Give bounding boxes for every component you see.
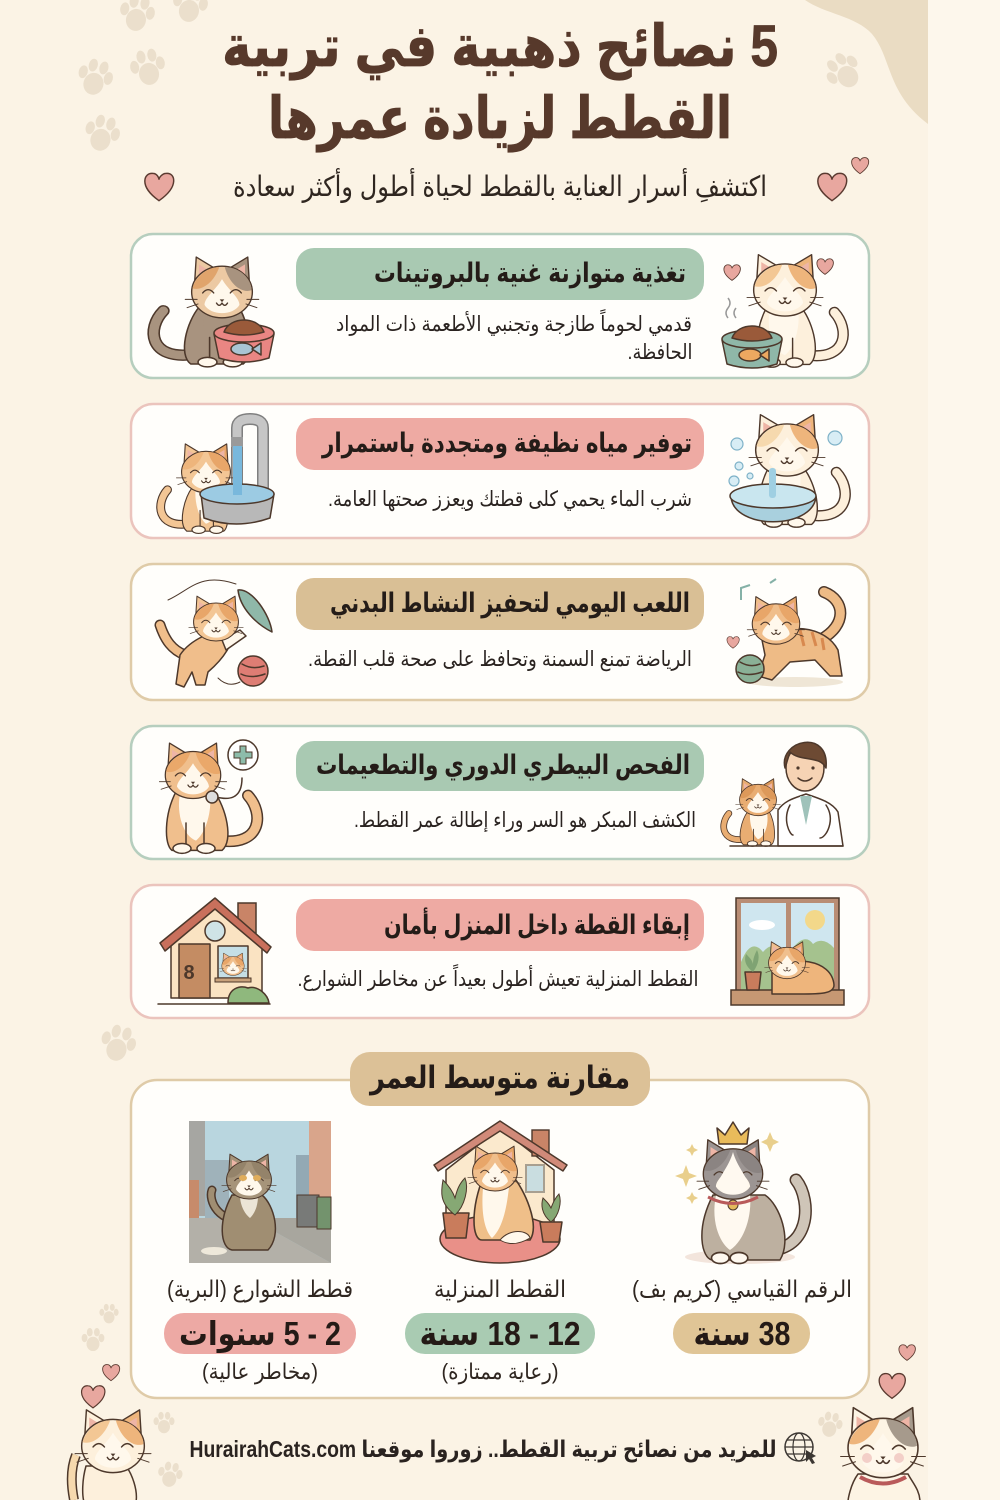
panel: indoors <box>131 885 869 1018</box>
label: قطط الشوارع (البرية) <box>167 1276 353 1303</box>
icon: cat at water fountain <box>161 419 274 533</box>
description <box>336 308 692 364</box>
icon: crowned cat <box>675 1122 805 1264</box>
value pill <box>673 1313 810 1354</box>
icon: happy cat with bowl <box>722 255 843 368</box>
heading: تغذية متوازنة غنية بالبروتينات <box>374 258 686 289</box>
panel: vet <box>131 726 869 859</box>
icon: vet with cat <box>724 742 843 846</box>
panel: lifespan comparison <box>131 1052 869 1398</box>
subtitle: اكتشفِ أسرار العناية بالقطط لحياة أطول وأكثر سعادة <box>233 167 767 203</box>
icon: cat eating with pink bowl <box>154 257 274 367</box>
icon: cat with stethoscope <box>159 740 258 853</box>
panel: nutrition <box>131 234 869 378</box>
title <box>222 14 778 153</box>
icon: globe cursor <box>785 1433 816 1464</box>
hearts decoration <box>82 158 915 1408</box>
label: القطط المنزلية <box>434 1276 566 1303</box>
icon: house cat on cushion <box>434 1121 567 1263</box>
column: street cats <box>164 1121 356 1384</box>
description: الكشف المبكر هو السر وراء إطالة عمر القطط. <box>354 809 696 833</box>
heading pill <box>296 899 704 951</box>
icon: walking cat with yarn <box>727 579 843 687</box>
heading pill <box>296 578 704 630</box>
heading: إبقاء القطة داخل المنزل بأمان <box>384 907 690 941</box>
icon: window with cat <box>731 898 844 1005</box>
column: house cats <box>405 1121 595 1384</box>
panel: water <box>131 404 869 538</box>
icon: street cat illustration <box>189 1121 331 1263</box>
heading pill <box>296 248 704 300</box>
heading: الفحص البيطري الدوري والتطعيمات <box>316 750 690 781</box>
decorative corner blob <box>805 0 928 124</box>
note: (مخاطر عالية) <box>202 1359 318 1384</box>
icon: corner cat left <box>72 1410 151 1500</box>
heading pill <box>296 418 704 470</box>
column: record <box>632 1122 852 1354</box>
value pill <box>405 1313 595 1354</box>
value: 12 - 18 سنة <box>420 1315 580 1352</box>
value: 38 سنة <box>694 1315 790 1352</box>
description: قدمي لحوماً طازجة وتجنبي الأطعمة ذات المواد <box>336 308 692 336</box>
heading pill <box>296 741 704 791</box>
label: الرقم القياسي (كريم بف) <box>632 1276 852 1303</box>
icon: house: 8 <box>183 962 195 984</box>
section heading: مقارنة متوسط العمر <box>368 1060 630 1096</box>
paw prints background <box>74 0 868 1489</box>
description: الحافظة. <box>628 341 692 364</box>
heading: اللعب اليومي لتحفيز النشاط البدني <box>330 588 690 619</box>
icon: cat drinking from bowl <box>729 415 845 527</box>
icon: jumping cat with feather <box>160 580 272 687</box>
value: 2 - 5 سنوات <box>179 1315 341 1354</box>
note: (رعاية ممتازة) <box>442 1359 558 1384</box>
title: 5 نصائح ذهبية في تربية <box>222 14 778 81</box>
heading: توفير مياه نظيفة ومتجددة باستمرار <box>320 428 692 459</box>
icon: house <box>158 898 271 1004</box>
section heading pill <box>350 1052 650 1106</box>
icon: corner cat right <box>841 1408 925 1500</box>
right margin strip <box>928 0 1000 1500</box>
footer text: للمزيد من نصائح تربية القطط.. زوروا موقعنا HurairahCats.com <box>190 1436 776 1463</box>
description: شرب الماء يحمي كلى قطتك ويعزز صحتها العامة. <box>328 488 692 511</box>
description: القطط المنزلية تعيش أطول بعيداً عن مخاطر الشوارع. <box>298 963 698 991</box>
panel: play <box>131 564 869 700</box>
title: القطط لزيادة عمرها <box>268 86 732 153</box>
description: الرياضة تمنع السمنة وتحافظ على صحة قلب القطة. <box>308 648 692 671</box>
value pill <box>164 1313 356 1354</box>
